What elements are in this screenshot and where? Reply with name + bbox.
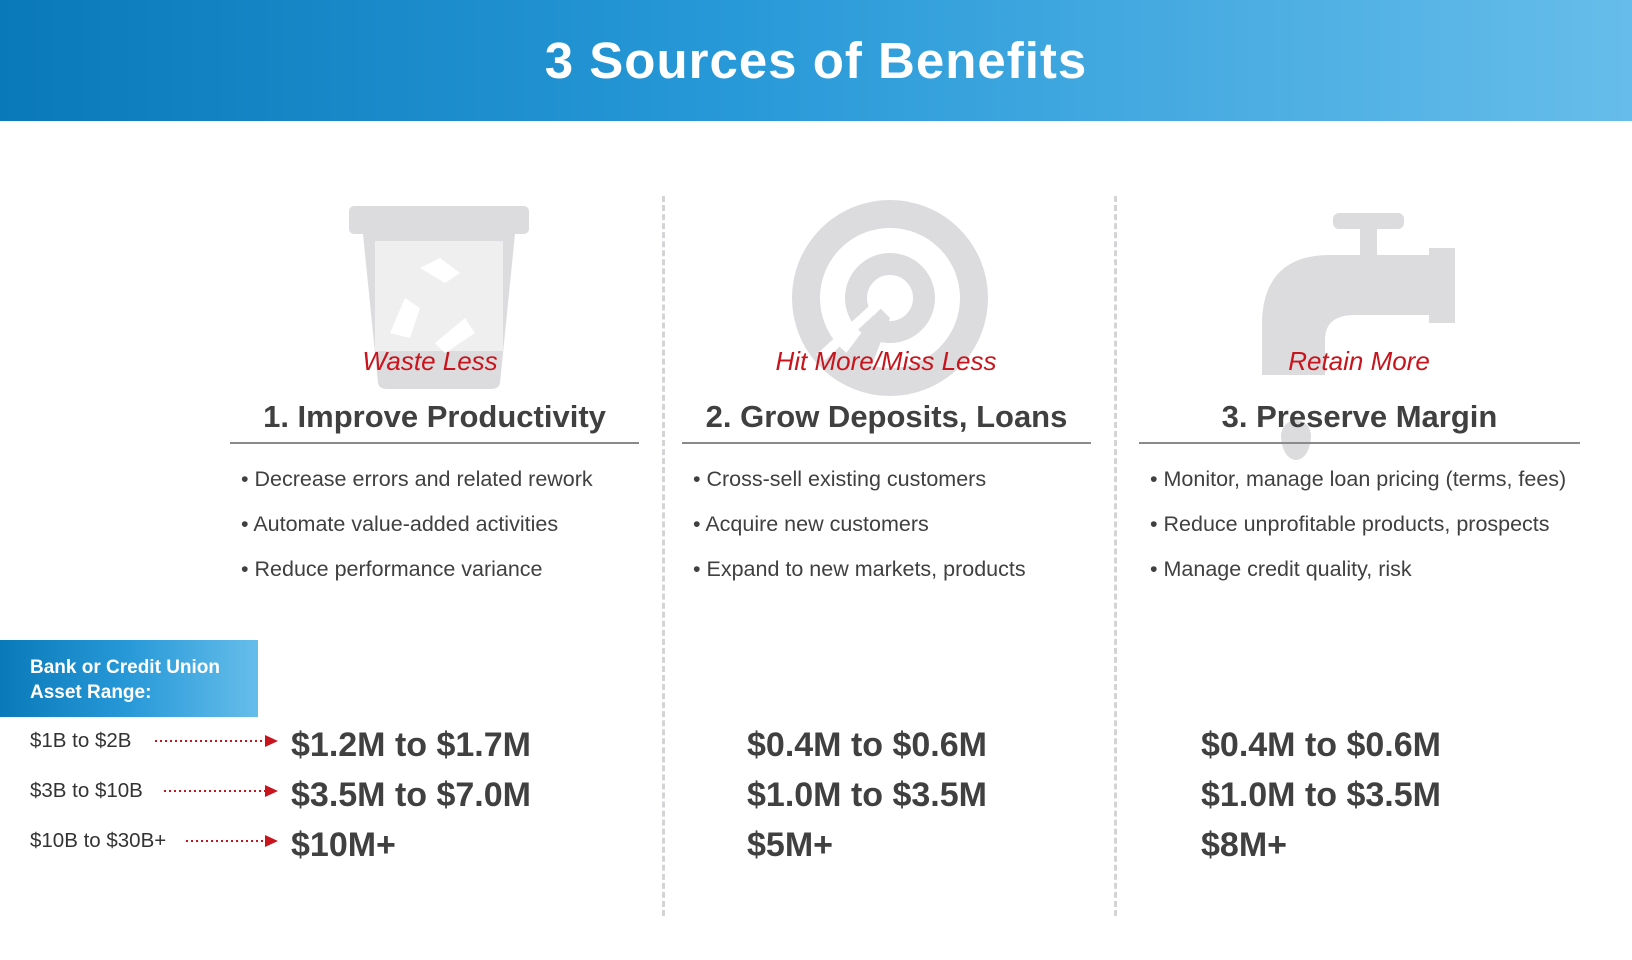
asset range box: Bank or Credit Union bbox=[30, 657, 220, 678]
icon: target bbox=[792, 200, 988, 396]
bullets 1: • Automate value-added activities bbox=[241, 512, 558, 536]
values column 1 bbox=[291, 726, 531, 864]
title: 3 Sources of Benefits bbox=[545, 32, 1087, 89]
bullets 3: • Monitor, manage loan pricing (terms, fees) bbox=[1150, 467, 1566, 491]
values column 3 bbox=[1201, 726, 1441, 864]
values column 3: $1.0M to $3.5M bbox=[1201, 776, 1441, 814]
heading 3: 3. Preserve Margin bbox=[1222, 399, 1497, 434]
bullets 2: • Cross-sell existing customers bbox=[693, 467, 986, 491]
asset range labels with arrows bbox=[30, 729, 166, 852]
bullets 1: • Decrease errors and related rework bbox=[241, 467, 593, 491]
bullets 1: • Reduce performance variance bbox=[241, 557, 543, 581]
bullets 2 bbox=[693, 467, 1026, 581]
asset range labels with arrows: $1B to $2B bbox=[30, 729, 131, 752]
asset range box bbox=[0, 640, 258, 717]
values column 2 bbox=[747, 726, 987, 864]
bullets 3: • Reduce unprofitable products, prospects bbox=[1150, 512, 1550, 536]
values column 1: $3.5M to $7.0M bbox=[291, 776, 531, 814]
red tagline 2: Hit More/Miss Less bbox=[775, 346, 997, 376]
heading 1: 1. Improve Productivity bbox=[263, 399, 606, 434]
bullets 2: • Acquire new customers bbox=[693, 512, 929, 536]
red tagline 1: Waste Less bbox=[362, 346, 498, 376]
values column 1: $1.2M to $1.7M bbox=[291, 726, 531, 764]
asset range box: Asset Range: bbox=[30, 682, 151, 703]
header bar bbox=[0, 0, 1632, 121]
bullets 2: • Expand to new markets, products bbox=[693, 557, 1026, 581]
icon: water drop bbox=[1281, 420, 1311, 460]
values column 1: $10M+ bbox=[291, 826, 396, 864]
values column 2: $1.0M to $3.5M bbox=[747, 776, 987, 814]
bullets 3 bbox=[1150, 467, 1566, 581]
heading 2: 2. Grow Deposits, Loans bbox=[706, 399, 1067, 434]
values column 3: $8M+ bbox=[1201, 826, 1287, 864]
values column 2: $5M+ bbox=[747, 826, 833, 864]
asset range labels with arrows: $3B to $10B bbox=[30, 779, 143, 802]
asset range labels with arrows: $10B to $30B+ bbox=[30, 829, 166, 852]
bullets 1 bbox=[241, 467, 593, 581]
icon: wastebasket bbox=[349, 206, 529, 389]
red tagline 3: Retain More bbox=[1288, 346, 1430, 376]
icon: faucet bbox=[1262, 213, 1455, 375]
bullets 3: • Manage credit quality, risk bbox=[1150, 557, 1412, 581]
values column 3: $0.4M to $0.6M bbox=[1201, 726, 1441, 764]
values column 2: $0.4M to $0.6M bbox=[747, 726, 987, 764]
